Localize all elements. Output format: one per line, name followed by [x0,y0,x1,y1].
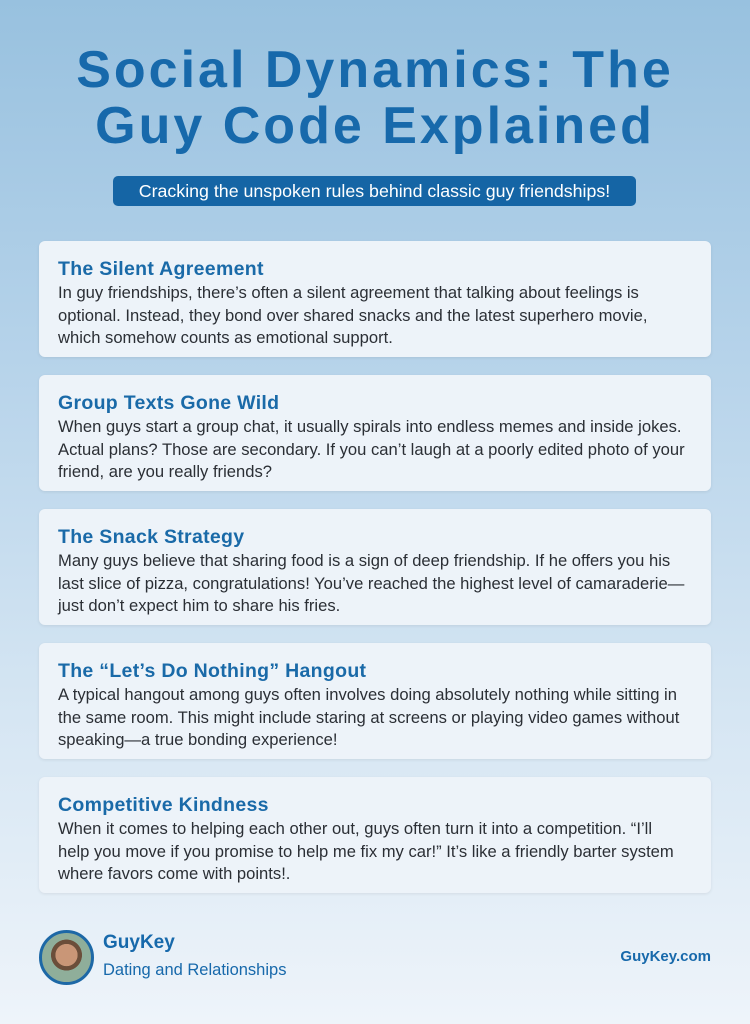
panel: group texts: Group Texts Gone Wild [58,392,279,414]
panel: silent agreement: The Silent Agreement [58,258,264,280]
website: GuyKey.com [620,948,711,965]
brand tagline: Dating and Relationships [103,961,286,979]
panel: competitive kindness: help you move if you promise to help me fix my car!” It’s like a friendly barter system [58,842,674,860]
icon: avatar [39,930,94,985]
panel: do nothing hangout [39,643,711,759]
panel: do nothing hangout: A typical hangout among guys often involves doing absolutely nothing while sitting in the same room. This might include staring at screens or playing video games without speaking—a true bonding experience! [58,685,679,749]
panel: snack strategy: Many guys believe that sharing food is a sign of deep friendship. If he offers you his last slice of pizza, congratulations! You’ve reached the highest level of camaraderie—just don’t expect him to share his fries. [58,551,684,615]
panel: snack strategy [39,509,711,625]
panel: do nothing hangout: The “Let’s Do Nothing” Hangout [58,660,366,682]
panel: group texts [39,375,711,491]
panel: snack strategy: The Snack Strategy [58,526,244,548]
panel: competitive kindness: When it comes to helping each other out, guys often turn it into a competition. “I’ll [58,819,652,838]
panel: competitive kindness: where favors come with points!. [58,864,290,883]
footer [39,930,711,985]
brand name: GuyKey [103,932,175,953]
panel: competitive kindness [39,777,711,893]
panel: silent agreement: In guy friendships, there’s often a silent agreement that talking about feelings is optional. Instead, they bond over shared snacks and the latest superhero movie, which somehow counts as emotional support. [58,283,647,347]
panel: competitive kindness: Competitive Kindness [58,794,269,816]
title [76,41,674,155]
panel: group texts: When guys start a group chat, it usually spirals into endless memes and inside jokes. Actual plans? Those are secondary. If you can’t laugh at a poorly edited photo of your friend, are you really friends? [58,417,685,481]
subtitle pill [113,176,636,206]
title: Guy Code Explained [95,97,655,155]
subtitle pill: Cracking the unspoken rules behind classic guy friendships! [139,181,610,201]
panel: silent agreement [39,241,711,357]
title: Social Dynamics: The [76,41,674,99]
